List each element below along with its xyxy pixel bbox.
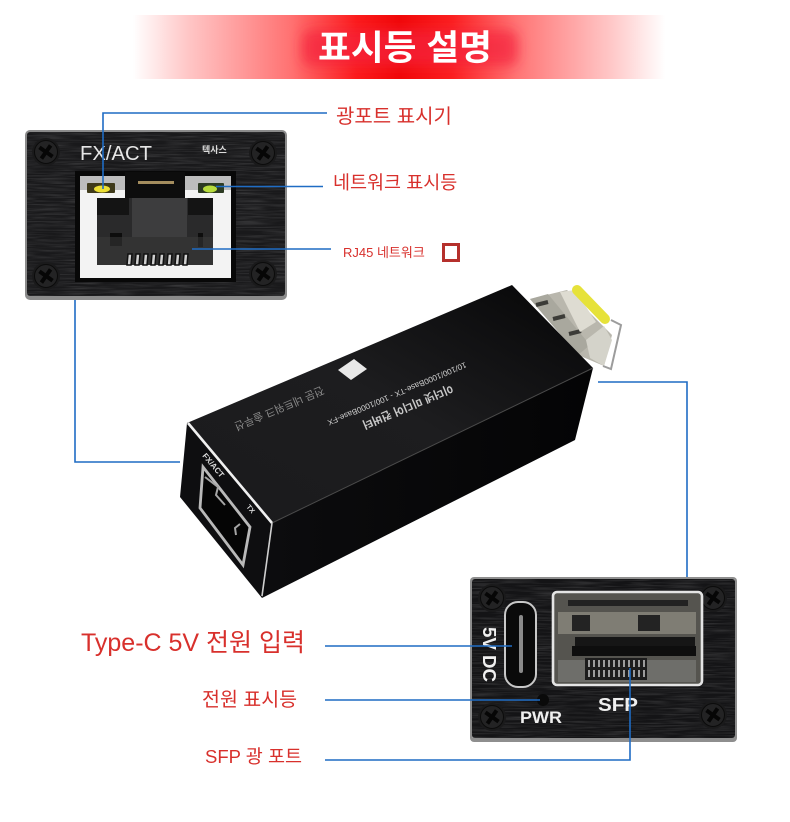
power LED <box>537 694 549 706</box>
label: FX/ACT: FX/ACT <box>80 143 152 165</box>
callout: power indicator: 전원 표시등 <box>202 689 297 711</box>
SFP cage <box>553 592 702 685</box>
callout: optical port indicator: 광포트 표시기 <box>336 105 452 128</box>
label: PWR: PWR <box>520 708 562 727</box>
callout: RJ45 network: RJ45 네트워크 <box>343 245 425 260</box>
label: 5V DC: 5V DC <box>479 627 499 682</box>
callout: network indicator: 네트워크 표시등 <box>333 172 457 193</box>
callout: Type-C power input: Type-C 5V 전원 입력 <box>81 629 305 657</box>
yellow handle <box>577 290 605 319</box>
title: 표시등 설명 <box>318 29 492 68</box>
rotated device text: maker line: 전문 네트워크 솔루션 <box>232 383 326 433</box>
front bezel <box>188 423 272 523</box>
side face <box>262 368 593 598</box>
contacts <box>127 254 188 265</box>
panel: SFP side photo <box>470 577 737 742</box>
title banner <box>133 15 665 79</box>
front face <box>180 423 272 598</box>
front bezel lower <box>262 523 272 596</box>
rotated device text: name: 이더넷 미디어 컨버터 <box>360 381 455 432</box>
label: maker: 텍사스 <box>202 144 227 155</box>
icon: screws <box>478 584 727 731</box>
device body <box>180 285 593 598</box>
RJ45 port <box>75 171 236 282</box>
device port <box>200 467 250 565</box>
callout lines <box>75 113 687 760</box>
label: SFP: SFP <box>598 695 638 715</box>
left LED <box>87 183 115 193</box>
rotated device text: spec: 10/100/1000Base-TX - 100/1000Base-FX <box>326 360 468 427</box>
port marking left: FX/ACT <box>200 452 226 480</box>
icon: box glyph <box>444 244 458 260</box>
icon: screws <box>32 138 277 290</box>
top face <box>187 285 593 523</box>
contacts <box>589 660 644 680</box>
wire latch <box>603 320 621 369</box>
port marking right: TX <box>244 504 256 515</box>
icon: port mark <box>338 359 367 380</box>
right LED <box>198 183 224 193</box>
USB-C port <box>505 602 536 687</box>
callout: SFP optical port: SFP 광 포트 <box>205 746 302 767</box>
edge highlight <box>272 368 593 523</box>
SFP module <box>530 290 621 369</box>
panel: RJ45 front photo <box>25 130 287 300</box>
port tab <box>205 477 240 535</box>
